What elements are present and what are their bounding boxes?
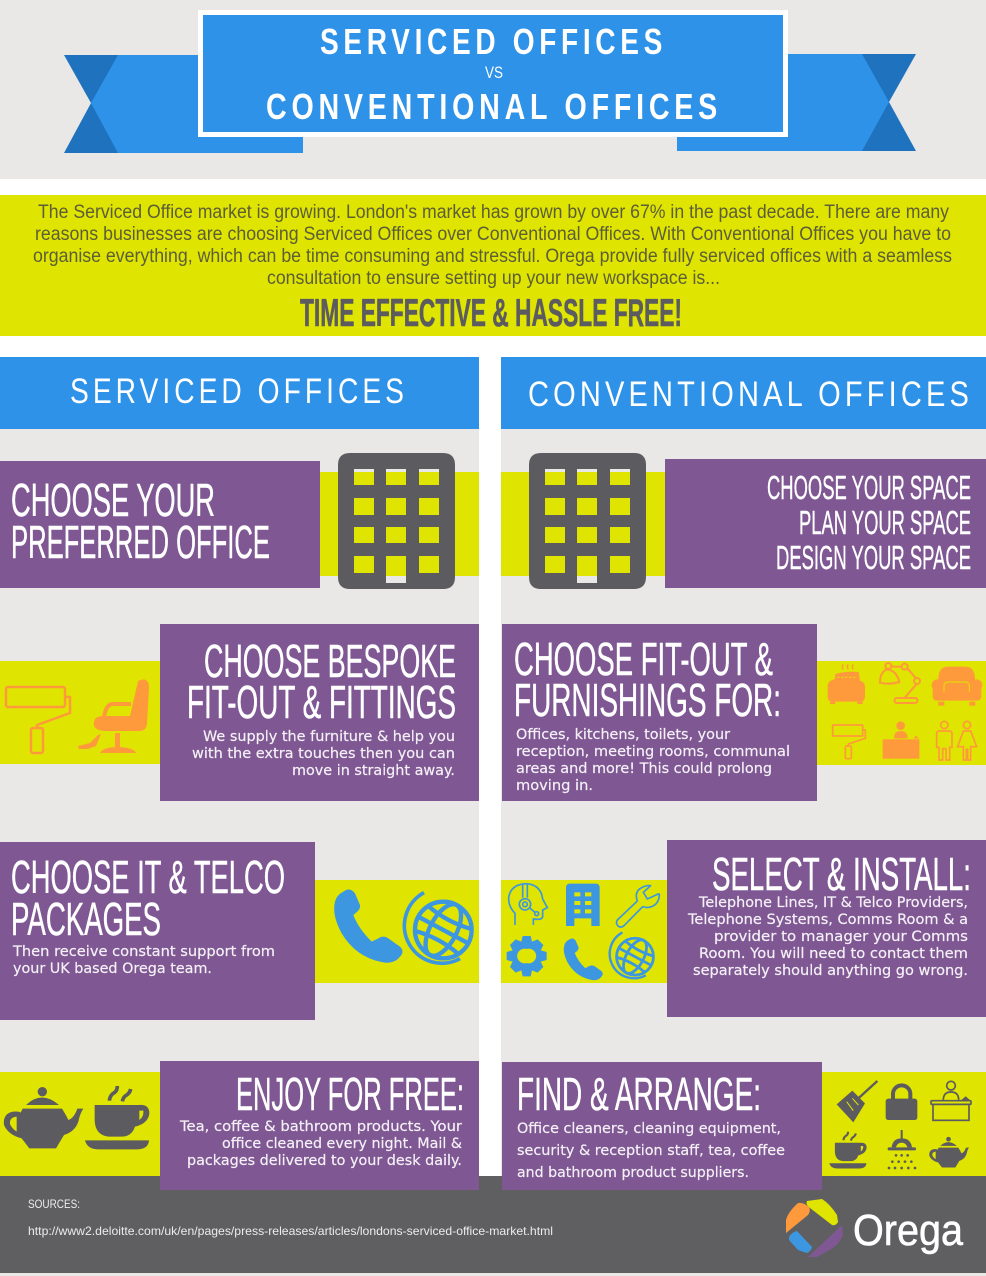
body text: reception, meeting rooms, communal bbox=[516, 744, 790, 760]
body text bbox=[12, 944, 275, 977]
body text: Tea, coffee & bathroom products. Your bbox=[179, 1119, 462, 1135]
body text: with the extra touches then you can bbox=[192, 746, 455, 762]
icon: gear bbox=[507, 936, 547, 976]
heading: FIT-OUT & FITTINGS bbox=[187, 676, 456, 728]
icon group: services bbox=[829, 1081, 971, 1169]
body text: separately should anything go wrong. bbox=[693, 963, 968, 979]
heading bbox=[187, 635, 456, 728]
title banner bbox=[64, 12, 916, 153]
body text: move in straight away. bbox=[292, 763, 455, 779]
logo: Orega: Orega bbox=[853, 1206, 963, 1255]
icon: reception desk bbox=[931, 1081, 971, 1120]
centre divider bbox=[479, 357, 501, 1190]
body text: areas and more! This could prolong bbox=[516, 761, 772, 777]
body text: moving in. bbox=[516, 778, 593, 794]
title line 2: CONVENTIONAL OFFICES bbox=[266, 86, 722, 127]
heading: CHOOSE BESPOKE bbox=[204, 635, 456, 687]
icon: padlock bbox=[886, 1085, 917, 1120]
icon: telephone small bbox=[564, 938, 603, 980]
icon: broom bbox=[837, 1081, 877, 1122]
row 1 left: choose your preferred office bbox=[0, 453, 479, 589]
icon: toaster bbox=[828, 664, 865, 704]
icon: headset head bbox=[509, 884, 547, 925]
icon: man and woman bbox=[937, 721, 977, 760]
body text: security & reception staff, tea, coffee bbox=[517, 1143, 785, 1159]
icon: paint roller bbox=[833, 725, 865, 759]
body text bbox=[516, 727, 790, 794]
row 2 left: bespoke fit-out bbox=[0, 624, 479, 801]
icon group: IT and telecoms bbox=[507, 884, 660, 982]
body text: provider to manager your Comms bbox=[714, 929, 968, 945]
body text: Telephone Systems, Comms Room & a bbox=[687, 912, 968, 928]
body text bbox=[517, 1121, 785, 1181]
heading bbox=[11, 474, 270, 568]
logo: Orega bbox=[786, 1199, 963, 1257]
column header: serviced offices: SERVICED OFFICES bbox=[70, 372, 408, 411]
heading bbox=[514, 633, 781, 726]
intro headline: TIME EFFECTIVE & HASSLE FREE! bbox=[300, 292, 682, 335]
row 3 right: select and install bbox=[501, 840, 986, 1017]
white separators bbox=[0, 179, 986, 357]
heading: PACKAGES bbox=[11, 893, 161, 945]
row 1 right: choose plan design bbox=[501, 453, 986, 589]
body text: Room. You will need to contact them bbox=[699, 946, 968, 962]
intro text bbox=[33, 202, 952, 289]
heading: CHOOSE IT & TELCO bbox=[11, 851, 285, 903]
icon: office block bbox=[566, 884, 600, 926]
body text: and bathroom product suppliers. bbox=[517, 1165, 749, 1181]
icon: teapot bbox=[4, 1087, 83, 1148]
icon: telephone bbox=[334, 890, 402, 963]
icon: office building bbox=[529, 453, 646, 589]
row 2 right: fit-out and furnishings bbox=[502, 624, 986, 801]
icon: armchair bbox=[932, 667, 982, 706]
heading: PREFERRED OFFICE bbox=[11, 516, 270, 568]
body text: We supply the furniture & help you bbox=[203, 729, 455, 745]
heading bbox=[11, 851, 285, 945]
icon: shower bbox=[888, 1130, 916, 1169]
heading: ENJOY FOR FREE: bbox=[236, 1068, 464, 1120]
sources label: SOURCES: bbox=[28, 1197, 80, 1211]
icon: paint roller bbox=[6, 687, 70, 753]
body text bbox=[687, 895, 968, 979]
body text: Office cleaners, cleaning equipment, bbox=[517, 1121, 781, 1137]
icon: wrench bbox=[616, 886, 659, 927]
heading: FURNISHINGS FOR: bbox=[514, 674, 781, 726]
banner plate bbox=[200, 12, 786, 134]
body text bbox=[192, 729, 455, 779]
heading: CHOOSE YOUR bbox=[11, 474, 215, 526]
vs label: VS bbox=[485, 63, 503, 82]
row 4 right: find and arrange bbox=[502, 1062, 986, 1190]
intro panel bbox=[0, 195, 986, 336]
right ribbon tail bbox=[677, 54, 916, 151]
icon: teapot bbox=[929, 1137, 969, 1167]
icon: office building bbox=[338, 453, 455, 589]
body text: packages delivered to your desk daily. bbox=[187, 1153, 462, 1169]
left ribbon tail bbox=[64, 55, 303, 153]
icon: salon chair bbox=[78, 680, 149, 753]
icon group: furnishings bbox=[828, 663, 982, 760]
column header: serviced offices bbox=[0, 357, 479, 429]
icon: reception desk bbox=[883, 721, 919, 759]
footer bbox=[0, 1176, 986, 1273]
body text: Telephone Lines, IT & Telco Providers, bbox=[698, 895, 968, 911]
list bbox=[767, 469, 971, 576]
icon: coffee cup bbox=[829, 1132, 867, 1168]
column header: conventional offices bbox=[501, 357, 986, 429]
body text: office cleaned every night. Mail & bbox=[222, 1136, 462, 1152]
icon: globe bbox=[404, 892, 482, 968]
heading: FIND & ARRANGE: bbox=[517, 1068, 761, 1120]
source url: http://www2.deloitte.com/uk/en/pages/press-releases/articles/londons-serviced-office-market.html bbox=[28, 1224, 553, 1238]
body text: Offices, kitchens, toilets, your bbox=[516, 727, 730, 743]
icon: desk lamp bbox=[880, 663, 920, 703]
body text bbox=[179, 1119, 462, 1169]
row 4 left: enjoy for free bbox=[0, 1061, 479, 1190]
intro text: reasons businesses are choosing Serviced Offices over Conventional Offices. With Conventional Offices you have to bbox=[35, 224, 951, 245]
title line 1: SERVICED OFFICES bbox=[320, 21, 667, 62]
icon: globe small bbox=[610, 932, 660, 982]
body text: Then receive constant support from bbox=[12, 944, 275, 960]
intro text: consultation to ensure setting up your new workspace is... bbox=[267, 268, 720, 289]
row 3 left: IT and telco packages bbox=[0, 842, 482, 1020]
icon: coffee cup bbox=[85, 1086, 149, 1149]
body text: your UK based Orega team. bbox=[13, 961, 212, 977]
heading: CHOOSE FIT-OUT & bbox=[514, 633, 773, 685]
